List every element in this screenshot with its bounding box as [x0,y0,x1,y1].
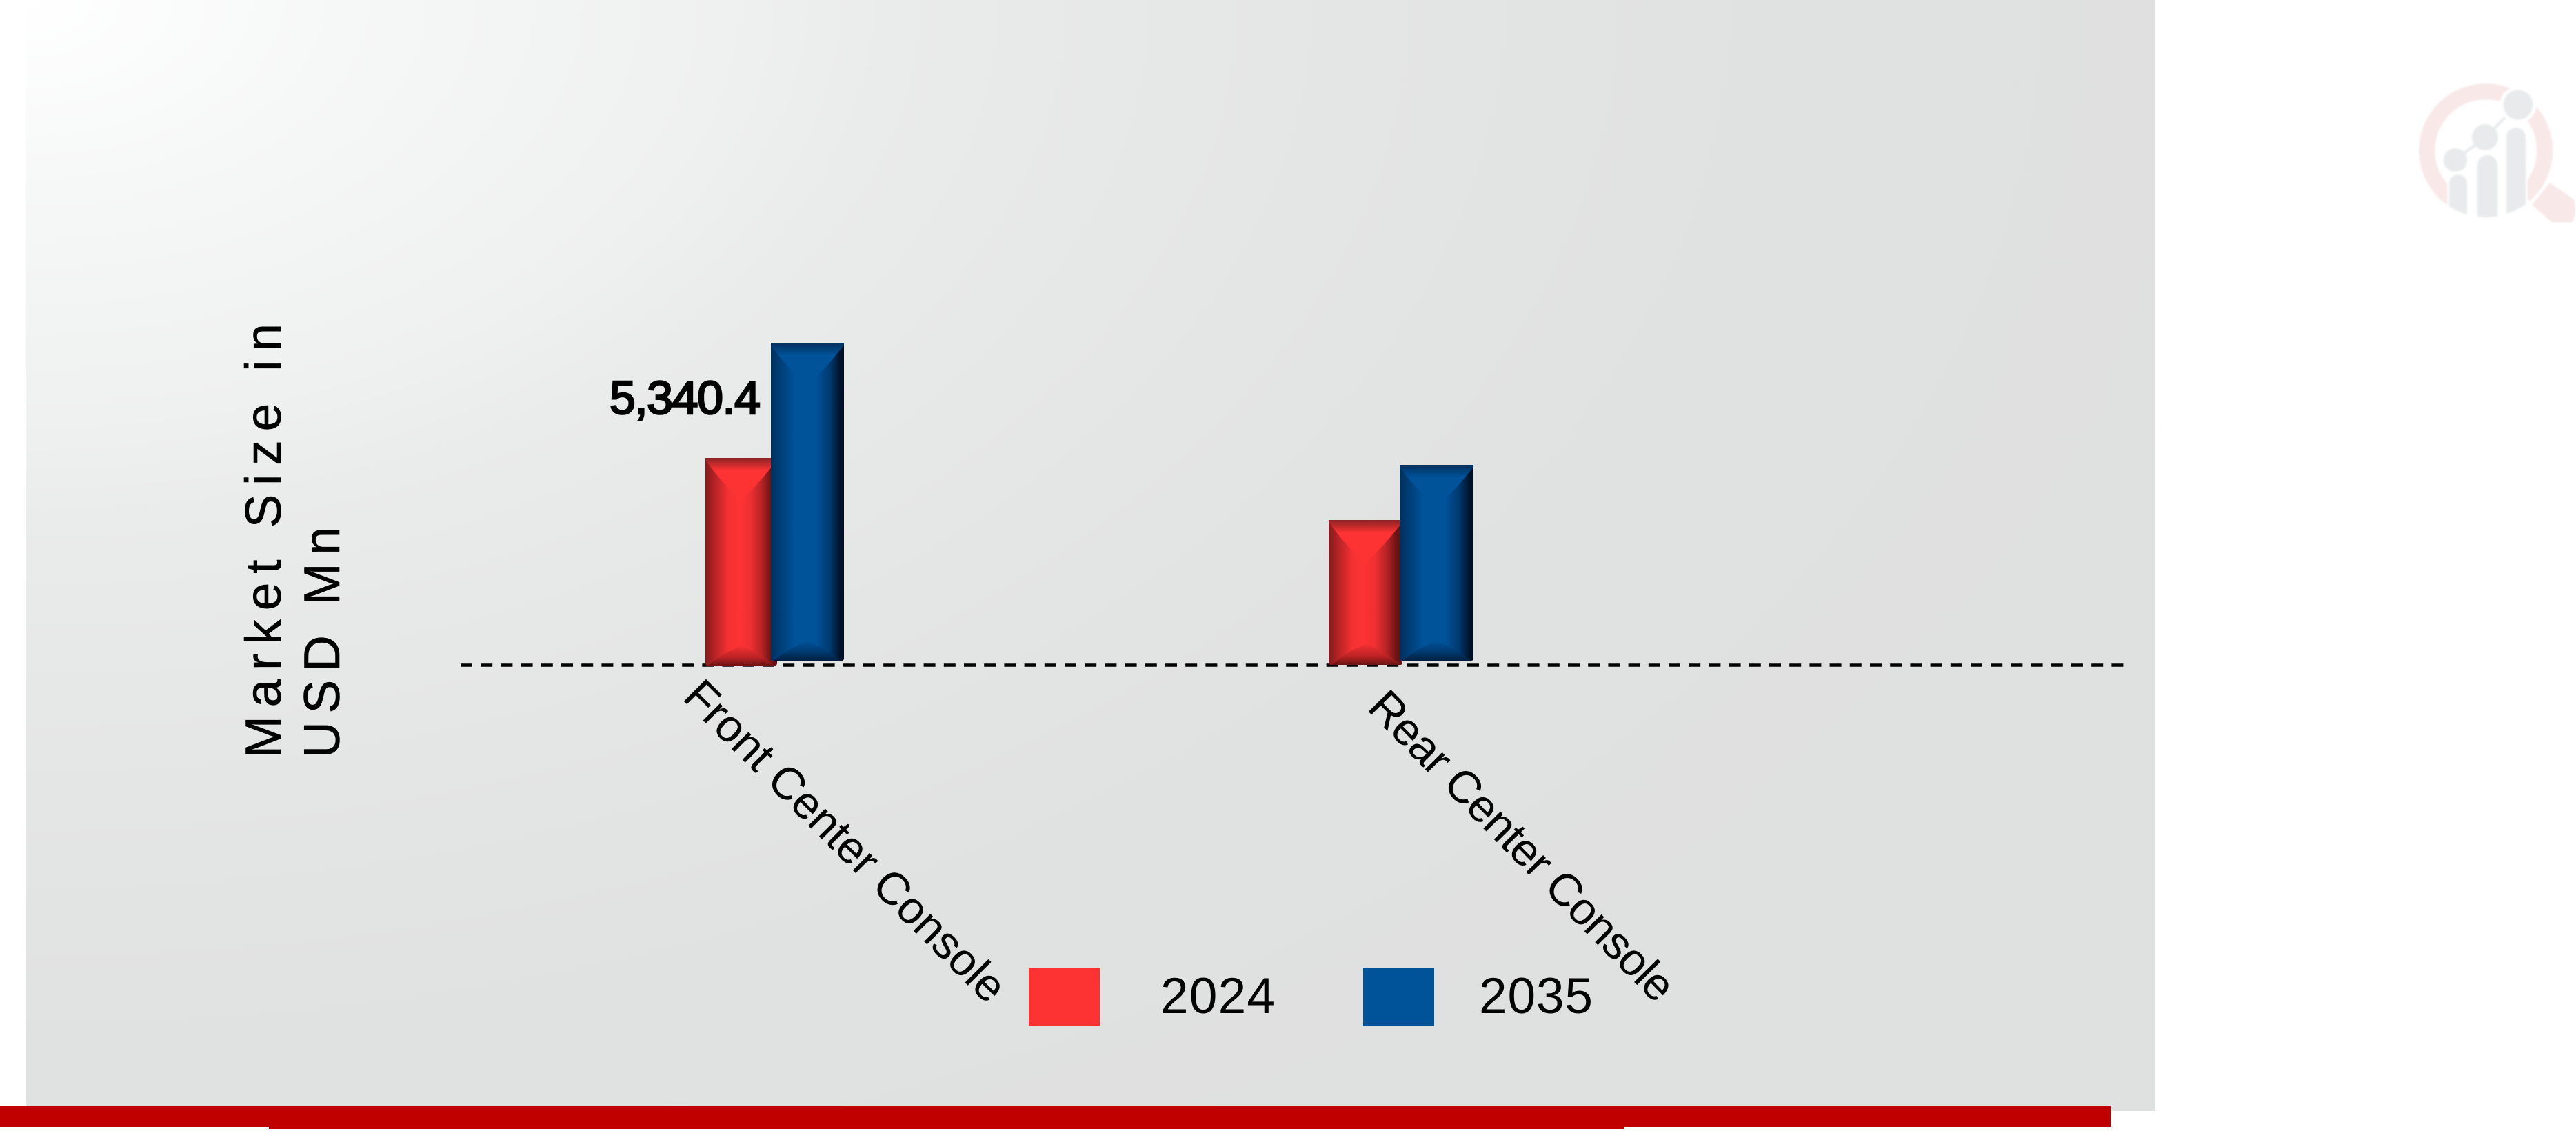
bar: Rear Center Console 2035 [1400,465,1473,661]
bar group: Rear Center Console [1329,465,1473,665]
legend item: 2024: 2024 [1160,968,1275,1024]
data label: 5,340.4: 5,340.4 [610,372,761,424]
footer bar [0,1106,2111,1129]
bar: Front Center Console 2024 [705,458,777,666]
bar group: Front Center Console [705,343,844,666]
legend item: 2035: 2035 [1479,968,1593,1024]
category label: Front Center Console: Front Center Console [674,670,1017,1012]
legend [1029,968,1593,1026]
y-axis title: Market Size in [236,323,292,758]
y-axis title: USD Mn [294,527,350,758]
category label: Rear Center Console: Rear Center Console [1359,680,1686,1011]
legend item: 2024 [1029,968,1275,1026]
y-axis title [236,323,350,758]
bar: Rear Center Console 2024 [1329,520,1402,665]
x-axis baseline [461,663,2124,667]
logo watermark [2427,88,2575,238]
bar: Front Center Console 2035 [771,343,844,661]
legend item: 2035 [1363,968,1593,1026]
